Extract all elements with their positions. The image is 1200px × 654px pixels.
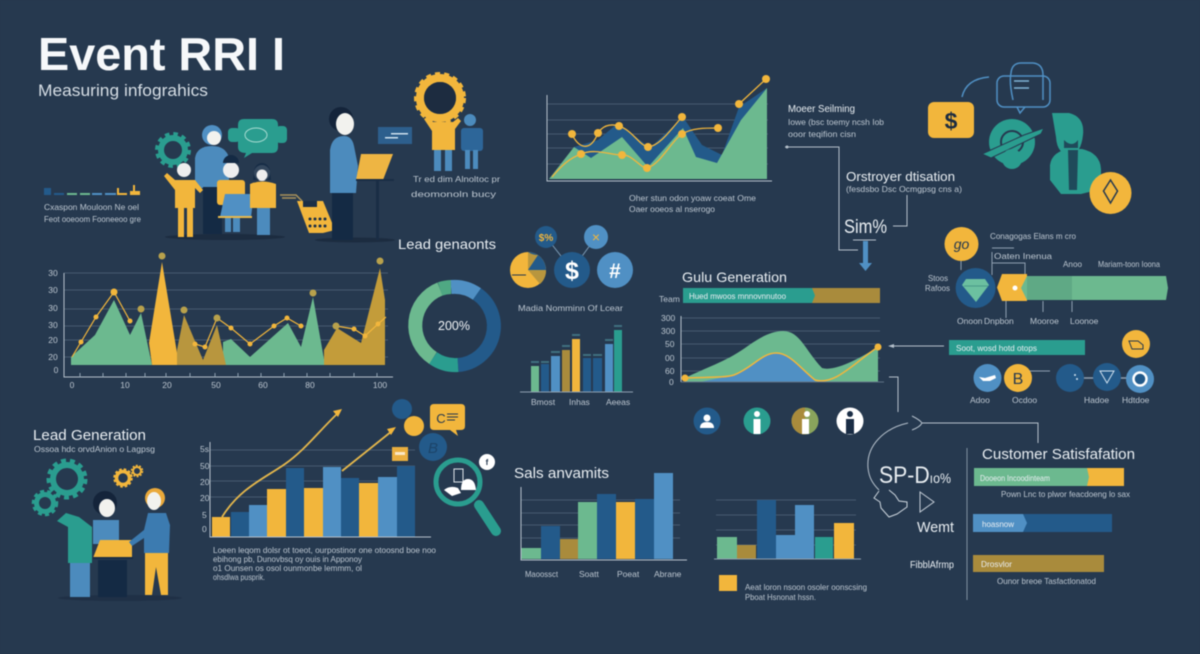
- adult in blue: [195, 125, 229, 234]
- bar one: [974, 468, 1131, 499]
- main area chart: 10: [120, 380, 130, 390]
- panel: customer satisfaction: [973, 447, 1135, 586]
- icon cluster: customer and money: [928, 63, 1132, 214]
- mini progress legend: Cxaspon Mouloon Ne oel: [44, 202, 139, 212]
- main area chart: 30: [48, 320, 58, 330]
- note: measure selling: ooor teqifion cisn: [788, 129, 856, 139]
- mini progress legend: Feot ooeoom Fooneeoo gre: [44, 214, 141, 224]
- stat: customer utilisation: (fesdsbo Dsc Ocmgpsg cns a): [846, 184, 962, 194]
- heading: lead generation: [33, 428, 155, 454]
- icon: cross: ×: [592, 229, 600, 245]
- chat bubble yellow: C: [436, 411, 446, 426]
- line chart: top performance: [547, 75, 772, 181]
- icon row: process nodes: Ocdoo: [1012, 395, 1037, 405]
- growth bar chart: 20: [200, 493, 210, 503]
- heading: guide generation: Gulu Generation: [682, 269, 787, 285]
- icon: dollar tile: $: [945, 108, 958, 134]
- main area chart: 0: [54, 365, 59, 375]
- icon: teal gears: [34, 460, 86, 514]
- icon: small coin: $%: [539, 233, 553, 244]
- main area chart: 60: [258, 380, 268, 390]
- main area chart: 30: [48, 303, 58, 313]
- stat: customer utilisation: Orstroyer dtisation: [846, 170, 955, 184]
- icon: play triangle: [920, 492, 934, 512]
- second bar chart: [714, 500, 861, 559]
- icon row: process nodes: Hadoe: [1084, 395, 1109, 405]
- icon: yellow gears: [114, 466, 142, 486]
- icon: teal gear: [157, 134, 189, 166]
- paragraph: ohsdlwa pusprik.: [213, 572, 265, 582]
- icon: info teal: [744, 408, 770, 434]
- paragraph: ebihong pb, Dunovbsq oy ouis in Apponoy: [213, 554, 363, 564]
- icon: yellow badge top: [1122, 330, 1150, 358]
- smooth area chart: [661, 313, 884, 387]
- label: went: Wemt: [917, 519, 955, 536]
- progress bar: generation: Team: [659, 294, 680, 304]
- process: funnel bar: Dnpbon: [984, 316, 1014, 326]
- process: funnel bar: Rafoos: [925, 283, 950, 293]
- icon row: process nodes: [970, 330, 1154, 405]
- icon: teal dial: [982, 119, 1044, 169]
- donut chart: [415, 287, 494, 365]
- icon: dollar tile: [928, 102, 974, 138]
- icon row: process nodes: Hdtdoe: [1122, 395, 1150, 405]
- coin dark: [392, 399, 412, 419]
- chart note: [719, 575, 867, 602]
- progress bar: generation: Hued mwoos mnnovnnutoo: [689, 291, 786, 301]
- bar three: Ounor breoe Tasfactlonatod: [997, 576, 1096, 586]
- stat: customer utilisation: Sim%: [844, 217, 887, 238]
- coin B: B: [428, 440, 438, 457]
- icon: hand sketch: [874, 490, 907, 517]
- main area chart: 20: [48, 352, 58, 362]
- bar one: Dooeon Incoodinteam: [980, 473, 1050, 483]
- donut chart: 200%: [438, 319, 470, 333]
- process: funnel bar: Conagogas Elans m cro: [990, 231, 1076, 241]
- icon: teal person: [1050, 113, 1101, 194]
- note: measure selling: Moeer Seilming: [788, 104, 855, 115]
- child in yellow: [250, 163, 276, 235]
- icon: info white: [836, 408, 864, 434]
- mini progress legend: [44, 185, 141, 224]
- growth bar chart: 20: [200, 477, 210, 487]
- small bar chart: Bmost: [531, 397, 556, 407]
- small bar chart: [520, 325, 633, 407]
- icon: hash: #: [609, 260, 621, 283]
- main area chart: 20: [48, 335, 58, 345]
- process: funnel bar: Mooroe: [1030, 316, 1059, 326]
- yellow box: [93, 540, 133, 559]
- heading: small bar chart: Madia Nomminn Of Lcear: [518, 303, 623, 313]
- icon: yellow B: B: [1013, 371, 1023, 388]
- process: funnel bar: Onoon: [957, 316, 983, 326]
- shopping cart: [280, 195, 335, 233]
- caption: [411, 174, 500, 199]
- icon cluster: search and chat: [392, 399, 496, 531]
- person in teal: [57, 513, 92, 597]
- illustration: lead generation team: [34, 460, 182, 601]
- coin yellow: [404, 416, 424, 436]
- teal label bar: [949, 340, 1085, 355]
- main area chart: 100: [373, 380, 387, 390]
- process: funnel bar: Stoos: [928, 273, 948, 283]
- stat: sp-d: SP-Dıo%: [879, 462, 951, 489]
- growth bar chart: 0: [202, 524, 207, 534]
- smooth area chart: 00: [665, 353, 675, 363]
- icon: glasses badge: go: [954, 236, 969, 252]
- chart caption: [629, 193, 756, 214]
- subtitle: Measuring infograhics: [38, 81, 208, 100]
- sales bar chart: Maoossct: [525, 569, 559, 579]
- bar two: hoasnow: [982, 519, 1015, 529]
- bar two: [973, 514, 1112, 532]
- stat: customer utilisation: [844, 170, 962, 238]
- child with raised arm: [164, 163, 203, 237]
- paragraph: [213, 545, 436, 582]
- bar three: Drosvlor: [981, 559, 1012, 569]
- main area chart: [48, 252, 393, 390]
- heading: lead generation donut: Lead genaonts: [398, 236, 496, 252]
- main area chart: 20: [162, 380, 172, 390]
- icon: blue bone: [974, 364, 1002, 392]
- status icon row: [694, 408, 864, 434]
- smooth area chart: 300: [661, 326, 675, 336]
- sales bar chart: Soatt: [579, 569, 599, 579]
- process: funnel bar: Anoo: [1063, 259, 1082, 269]
- main area chart: 0: [70, 380, 75, 390]
- icon: dark dots: [1056, 364, 1084, 392]
- label: fibble: FibblAfrmp: [910, 560, 954, 571]
- icon: gem badge: [956, 268, 996, 308]
- small blue panel: [378, 127, 412, 144]
- main area chart: 80: [305, 380, 315, 390]
- icon: dollar: $: [565, 257, 579, 285]
- icon: blue ring: [1126, 365, 1154, 393]
- person with dark hair: [93, 491, 127, 597]
- icon: person dark blue: [694, 408, 720, 434]
- illustration: gear head figures: [416, 74, 483, 171]
- icon: yellow diamond badge: [1090, 172, 1132, 214]
- main area chart: 30: [48, 285, 58, 295]
- main area chart: 30: [48, 268, 58, 278]
- icon: glasses badge: [944, 227, 978, 261]
- person in blue suit: [129, 488, 170, 595]
- paragraph: o1 Ounsen os osol ounmonbe lemmm, ol: [213, 563, 362, 573]
- speech bubble: [228, 119, 287, 158]
- icon: yellow B: [1004, 364, 1032, 392]
- growth bar chart: 5s: [200, 444, 209, 454]
- bar three: [973, 555, 1104, 586]
- connector arrows: [868, 344, 1038, 490]
- smooth area chart: 300: [661, 313, 675, 323]
- sales bar chart: [521, 473, 687, 579]
- sales bar chart: Poeat: [617, 569, 640, 579]
- process: funnel bar: Mariam-toon Ioona: [1098, 259, 1160, 269]
- icon row: process nodes: Adoo: [970, 395, 990, 405]
- icon: pie: [510, 252, 546, 288]
- arrows: [222, 409, 396, 517]
- heading: sales: Sals anvamits: [514, 465, 609, 482]
- arrow bar: [997, 274, 1168, 301]
- note: measure selling: Iowe (bsc toemy ncsh Iob: [788, 117, 884, 127]
- caption: Tr ed dim Alnoltoc pr: [413, 174, 500, 184]
- process: funnel bar: [925, 227, 1168, 326]
- caption: deomonoln bucy: [411, 189, 497, 199]
- icon: info olive and green: [792, 408, 818, 434]
- icon: dark funnel: [1093, 363, 1121, 391]
- child with laptop: [217, 155, 254, 232]
- connector with down arrow: [785, 146, 876, 271]
- small bar chart: Inhas: [569, 397, 590, 407]
- main area chart: 50: [211, 380, 221, 390]
- title: Event RRI I: [38, 28, 285, 80]
- small bar chart: Aeeas: [606, 397, 630, 407]
- growth bar chart: 5: [202, 510, 207, 520]
- presenter with laptop: [315, 107, 412, 242]
- chart note: Aeat loron nsoon osoler oonscsing: [745, 582, 867, 592]
- white bubble: f: [486, 458, 489, 467]
- heading: Customer Satisfafation: [982, 447, 1135, 463]
- chart caption: Oaer ooeos al nserogo: [629, 204, 715, 214]
- bar one: Pown Lnc to plwor feacdoeng lo sax: [1001, 489, 1131, 499]
- smooth area chart: 0: [669, 377, 674, 387]
- paragraph: Loeen leqom dolsr ot toeot, ourpostinor one otoosnd boe noo: [213, 545, 436, 555]
- note: measure selling: [788, 104, 884, 139]
- growth bar chart: 50: [200, 461, 210, 471]
- chart note: Pboat Hsnonat hssn.: [745, 592, 816, 602]
- sales bar chart: Abrane: [654, 569, 682, 579]
- growth bar chart: [200, 409, 431, 537]
- smooth area chart: 60: [665, 366, 675, 376]
- chart caption: Oher stun odon yoaw coeat Ome: [629, 193, 756, 203]
- progress bar: generation: [659, 288, 880, 304]
- icon cluster: payment circles: [510, 225, 633, 288]
- heading: lead generation: Lead Generation: [33, 428, 146, 444]
- teal label bar: Soot, wosd hotd otops: [956, 343, 1037, 353]
- smooth area chart: 50: [665, 339, 675, 349]
- small yellow tag: [392, 447, 408, 461]
- heading: lead generation: Ossoa hdc orvdAnion o Lagpsg: [34, 444, 155, 454]
- magnifier: [436, 460, 496, 531]
- process: funnel bar: Loonoe: [1070, 316, 1099, 326]
- illustration: family group with gear and speech bubble: [157, 119, 287, 240]
- icon: outline speech bubble: [962, 63, 1050, 113]
- process: funnel bar: Oaten Inenua: [994, 251, 1052, 261]
